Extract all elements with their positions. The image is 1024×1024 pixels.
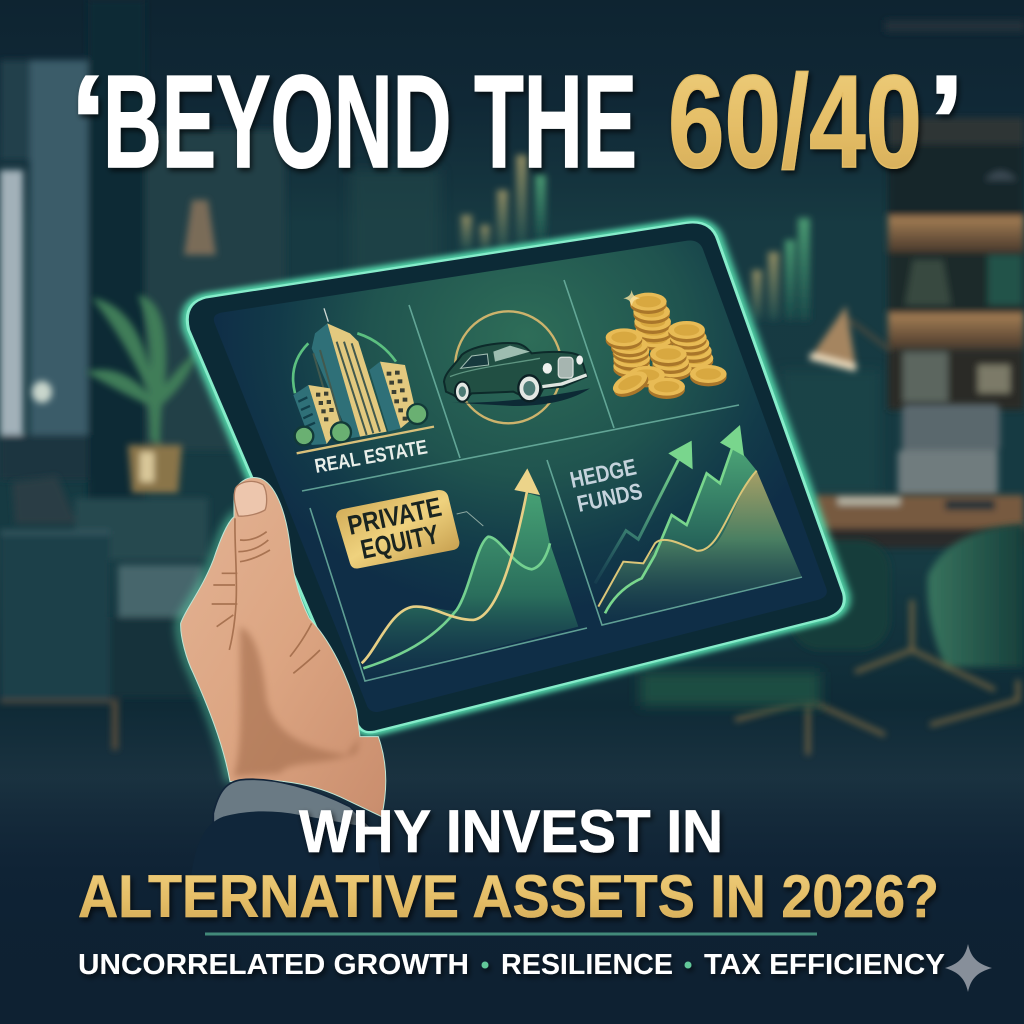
window lamp glow [32,381,52,403]
title: BEYOND THE [103,48,637,195]
sofa [0,476,208,750]
thumbnail [234,481,267,516]
benefits row [78,949,945,981]
private equity badge [336,490,459,568]
chair legs [735,600,1018,755]
green chairs [790,524,1024,667]
benefits row: TAX EFFICIENCY [704,949,945,981]
office chair [898,404,1000,495]
subtitle line two: ALTERNATIVE ASSETS IN 2026? [78,863,939,930]
green rug [640,672,820,706]
tablet screen [214,240,827,712]
divider [205,932,817,936]
shelves [885,20,1024,410]
label: hedge funds [568,454,645,517]
suit sleeve [191,811,382,880]
floor fade [0,770,1024,1024]
palm and thumb [181,478,386,817]
title: 60/40 [668,48,922,195]
private equity chart [336,468,578,680]
icon: classic car [444,311,590,423]
icon: sparkle star [945,944,992,992]
wall panels [350,170,880,495]
benefits row: UNCORRELATED GROWTH [78,949,469,981]
background bars left [461,155,546,250]
label: hedge funds: FUNDS [575,478,645,517]
icon: city buildings [293,308,434,453]
icon: gold coins [606,290,727,402]
label: hedge funds: HEDGE [568,454,639,493]
hedge funds chart [595,425,802,623]
label: real estate: REAL ESTATE [313,436,429,478]
shirt cuff [213,779,373,830]
tablet glow [187,222,844,732]
palm shading [233,627,360,777]
hand holding tablet with cuff [180,478,386,880]
skin creases [212,518,320,673]
tablet body [187,222,844,732]
desk lamp [810,306,890,368]
label: private equity [345,492,444,565]
desk [815,495,1024,548]
tablet [187,222,844,732]
title: ‘ [70,48,107,195]
benefits row: RESILIENCE [501,949,673,981]
title: ’ [928,48,965,195]
background bars right [752,218,810,320]
label: private equity: PRIVATE [345,492,444,541]
wall lamp [184,200,216,255]
subtitle line one: WHY INVEST IN [299,798,723,865]
plant [86,295,198,493]
screen dividers [302,280,802,681]
window and wall columns [0,0,285,520]
label: private equity: EQUITY [358,519,442,565]
